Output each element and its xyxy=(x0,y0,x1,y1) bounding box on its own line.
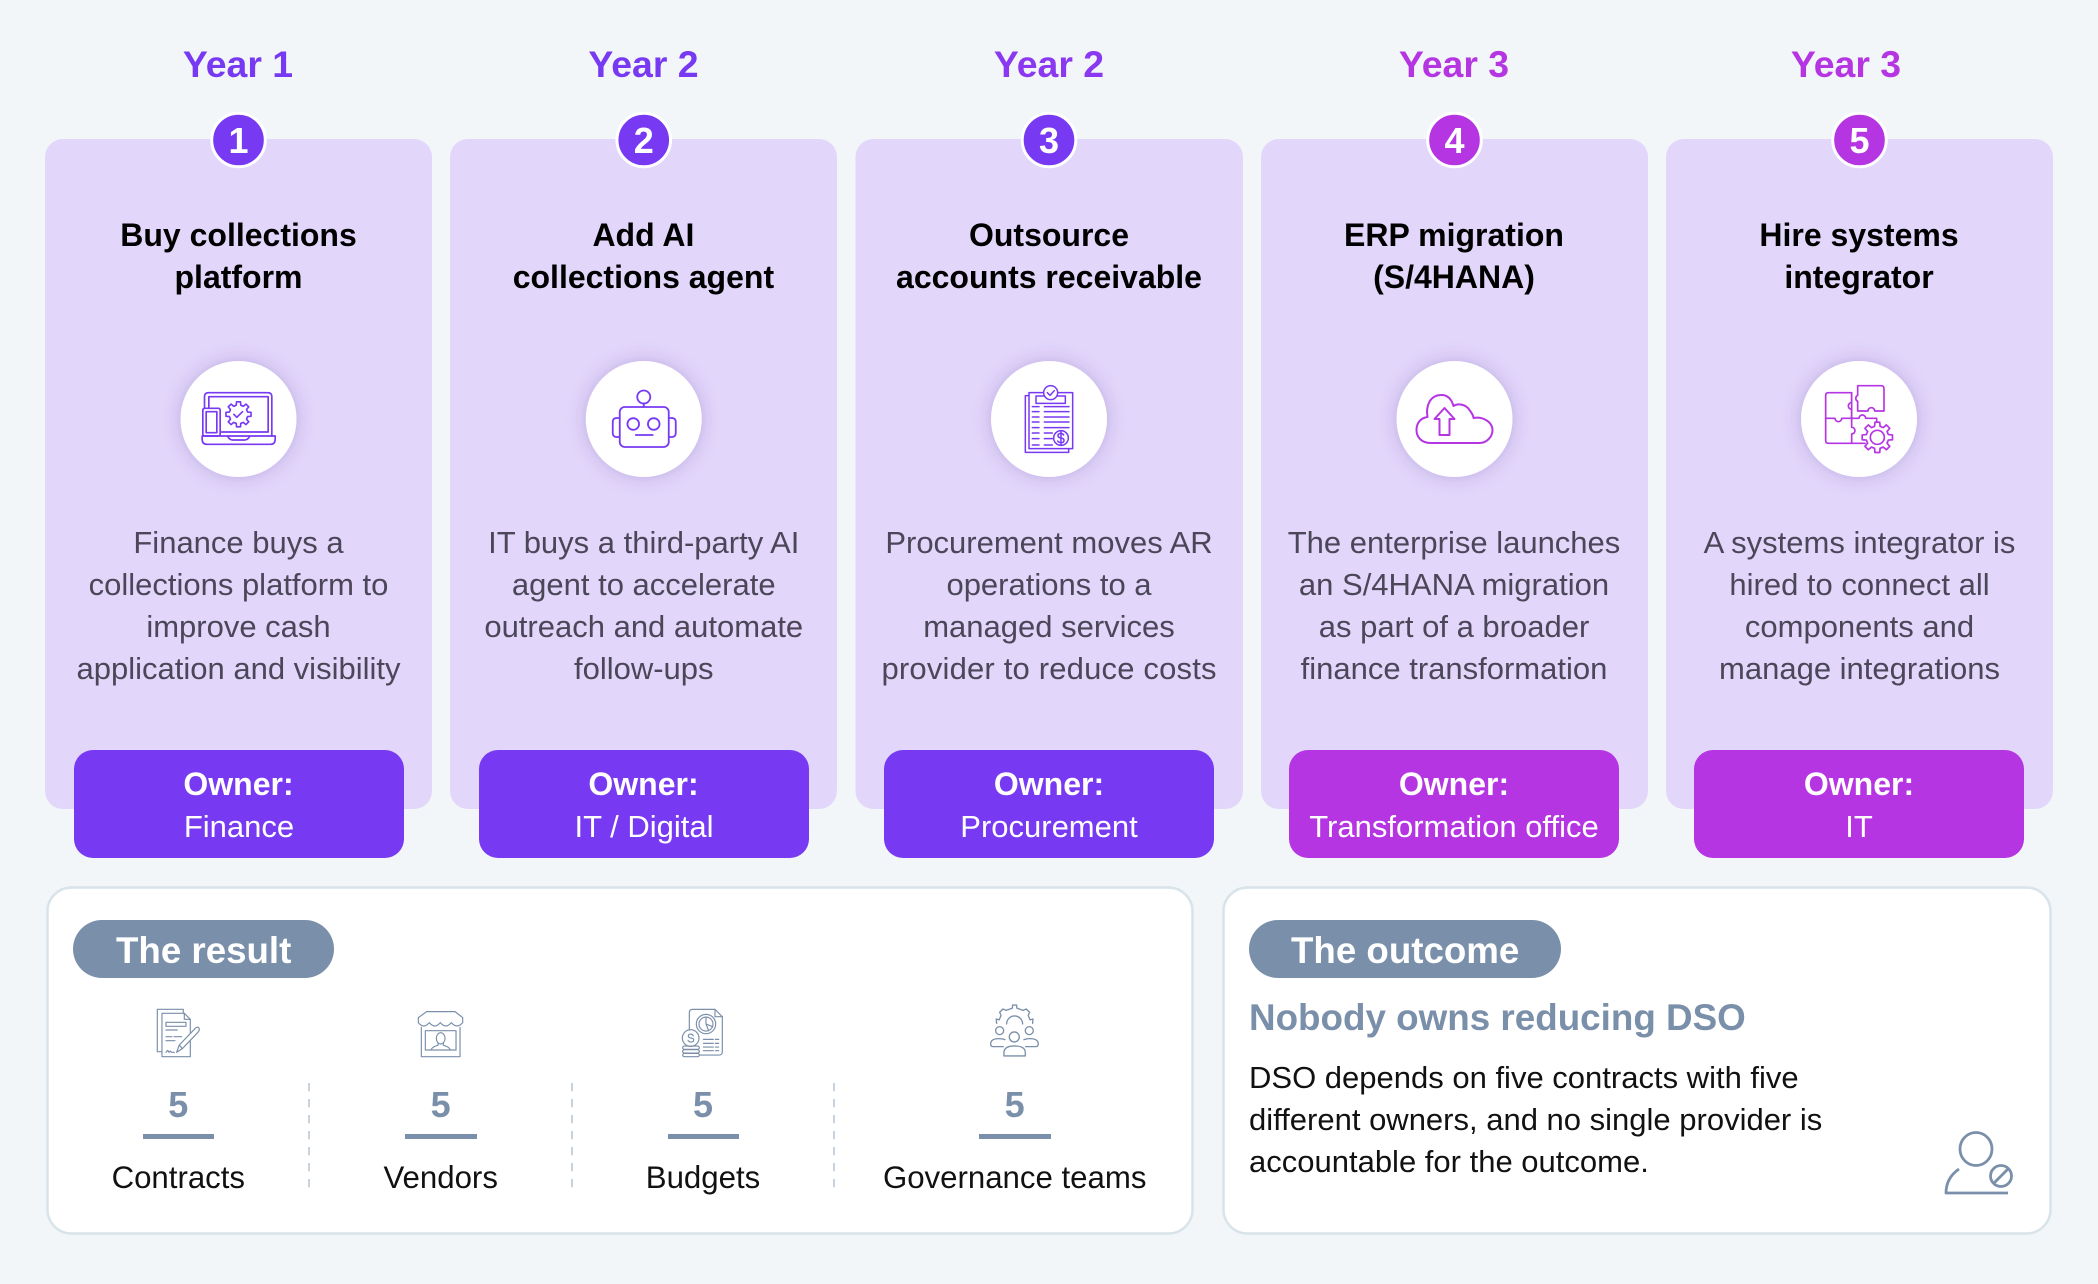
description 1: application and visibility xyxy=(77,651,401,686)
description 1: improve cash xyxy=(146,609,331,644)
title: Buy collections platform xyxy=(120,217,357,295)
stat: 5 Governance teams: Governance teams xyxy=(883,1160,1146,1195)
outcome text: DSO depends on five contracts with five xyxy=(1249,1060,1799,1095)
description 1 xyxy=(77,525,401,686)
owner box 2: IT / Digital xyxy=(575,809,713,844)
stat: 5 Governance teams: 5 xyxy=(1005,1084,1025,1125)
number badge 4 xyxy=(1428,113,1481,167)
stat: 5 Contracts: 5 xyxy=(168,1084,188,1125)
pill: The result: The result xyxy=(116,930,291,971)
owner box 1: Owner: xyxy=(183,766,294,802)
icon: governance team under gear xyxy=(990,1004,1039,1057)
description 4: finance transformation xyxy=(1301,651,1607,686)
pill: The outcome xyxy=(1249,920,1561,978)
title: Add AI collections agent xyxy=(513,217,774,295)
description 5: components and xyxy=(1745,609,1974,644)
number badge 4: 4 xyxy=(1444,120,1465,161)
description 4: as part of a broader xyxy=(1319,609,1589,644)
outcome text: accountable for the outcome. xyxy=(1249,1144,1649,1179)
card background 3 xyxy=(856,139,1243,809)
pill: The result xyxy=(73,920,334,978)
panel: step 3 xyxy=(856,43,1243,858)
owner box 4: Owner: xyxy=(1399,766,1509,802)
title: ERP migration (S/4HANA): ERP migration xyxy=(1344,217,1564,253)
icon: robot xyxy=(586,361,702,477)
heading: Nobody owns reducing DSO: Nobody owns reducing DSO xyxy=(1249,997,1746,1038)
panel: step 5 xyxy=(1666,43,2053,858)
icon: laptop with gear xyxy=(180,361,296,477)
description 3: managed services xyxy=(923,609,1175,644)
result panel background xyxy=(48,888,1192,1234)
stat: 5 Contracts xyxy=(112,1009,245,1195)
outcome text xyxy=(1249,1060,1822,1179)
description 2: agent to accelerate xyxy=(512,567,776,602)
panel: step 1 xyxy=(45,43,432,858)
owner box 1 xyxy=(74,750,404,858)
stat: 5 Contracts: Contracts xyxy=(112,1160,245,1195)
heading: Year 2: Year 2 xyxy=(994,43,1104,85)
title: Hire systems integrator xyxy=(1759,217,1959,295)
description 3: provider to reduce costs xyxy=(882,651,1216,686)
owner box 4: Transformation office xyxy=(1309,809,1599,844)
number badge 1 xyxy=(212,113,265,167)
description 3: Procurement moves AR xyxy=(885,525,1213,560)
owner box 3: Procurement xyxy=(960,809,1138,844)
number badge 5 xyxy=(1833,113,1886,167)
number badge 5: 5 xyxy=(1849,120,1870,161)
description 2: outreach and automate xyxy=(484,609,803,644)
panel: step 2 xyxy=(450,43,837,858)
description 1: collections platform to xyxy=(89,567,388,602)
description 2 xyxy=(484,525,803,686)
card background 4 xyxy=(1261,139,1648,809)
description 5: A systems integrator is xyxy=(1704,525,2015,560)
icon: clipboard with dollar xyxy=(991,361,1107,477)
title: Buy collections platform: platform xyxy=(174,259,302,295)
stat: 5 Vendors: Vendors xyxy=(383,1160,498,1195)
heading: Year 3: Year 3 xyxy=(1791,43,1901,85)
card background 2 xyxy=(450,139,837,809)
owner box 2 xyxy=(479,750,809,858)
title: Add AI collections agent: collections agent xyxy=(513,259,774,295)
number badge 3: 3 xyxy=(1039,120,1059,161)
heading: Year 1: Year 1 xyxy=(183,43,293,85)
description 1: Finance buys a xyxy=(133,525,344,560)
number badge 2: 2 xyxy=(634,120,654,161)
title: Add AI collections agent: Add AI xyxy=(592,217,694,253)
description 2: follow-ups xyxy=(574,651,714,686)
card background 5 xyxy=(1666,139,2053,809)
title: Hire systems integrator: integrator xyxy=(1784,259,1934,295)
owner box 3 xyxy=(884,750,1214,858)
icon: contract and pen xyxy=(156,1008,200,1058)
icon: person with no symbol xyxy=(1946,1132,2012,1193)
icon: storefront with person xyxy=(418,1011,464,1058)
description 2: IT buys a third-party AI xyxy=(488,525,799,560)
owner box 5: Owner: xyxy=(1804,766,1914,802)
description 5 xyxy=(1704,525,2015,686)
outcome panel background xyxy=(1224,888,2050,1234)
owner box 4 xyxy=(1289,750,1619,858)
panel: step 4 xyxy=(1261,43,1648,858)
description 4: The enterprise launches xyxy=(1288,525,1620,560)
card background 1 xyxy=(45,139,432,809)
description 4: an S/4HANA migration xyxy=(1299,567,1609,602)
title: Outsource accounts receivable: Outsource xyxy=(969,217,1129,253)
stat: 5 Governance teams xyxy=(883,1005,1146,1195)
description 5: manage integrations xyxy=(1719,651,2000,686)
owner box 2: Owner: xyxy=(588,766,699,802)
description 3: operations to a xyxy=(946,567,1152,602)
panel: the outcome xyxy=(1224,888,2050,1234)
stat: 5 Budgets xyxy=(646,1009,760,1195)
title: Outsource accounts receivable: accounts receivable xyxy=(896,259,1202,295)
description 5: hired to connect all xyxy=(1729,567,1990,602)
panel: the result xyxy=(48,888,1192,1234)
icon: cloud upload xyxy=(1396,361,1512,477)
title: ERP migration (S/4HANA) xyxy=(1344,217,1564,295)
number badge 1: 1 xyxy=(228,120,249,161)
heading: Year 2: Year 2 xyxy=(588,43,699,85)
title: Buy collections platform: Buy collections xyxy=(120,217,357,253)
owner box 1: Finance xyxy=(184,809,294,844)
stat: 5 Vendors xyxy=(383,1012,498,1195)
title: Outsource accounts receivable xyxy=(896,217,1202,295)
outcome text: different owners, and no single provider is xyxy=(1249,1102,1822,1137)
owner box 5 xyxy=(1694,750,2024,858)
stat: 5 Vendors: 5 xyxy=(431,1084,451,1125)
description 4 xyxy=(1288,525,1620,686)
pill: The outcome: The outcome xyxy=(1291,930,1519,971)
stat: 5 Budgets: Budgets xyxy=(646,1160,760,1195)
heading: Year 3: Year 3 xyxy=(1399,43,1509,85)
number badge 3 xyxy=(1022,113,1076,167)
stat: 5 Budgets: 5 xyxy=(693,1084,713,1125)
icon: budget report and coins xyxy=(682,1008,723,1058)
owner box 5: IT xyxy=(1845,809,1873,844)
owner box 3: Owner: xyxy=(994,766,1104,802)
icon: puzzle and gear xyxy=(1801,361,1917,477)
title: Hire systems integrator: Hire systems xyxy=(1759,217,1959,253)
number badge 2 xyxy=(617,113,671,167)
description 3 xyxy=(882,525,1216,686)
title: ERP migration (S/4HANA): (S/4HANA) xyxy=(1373,259,1535,295)
